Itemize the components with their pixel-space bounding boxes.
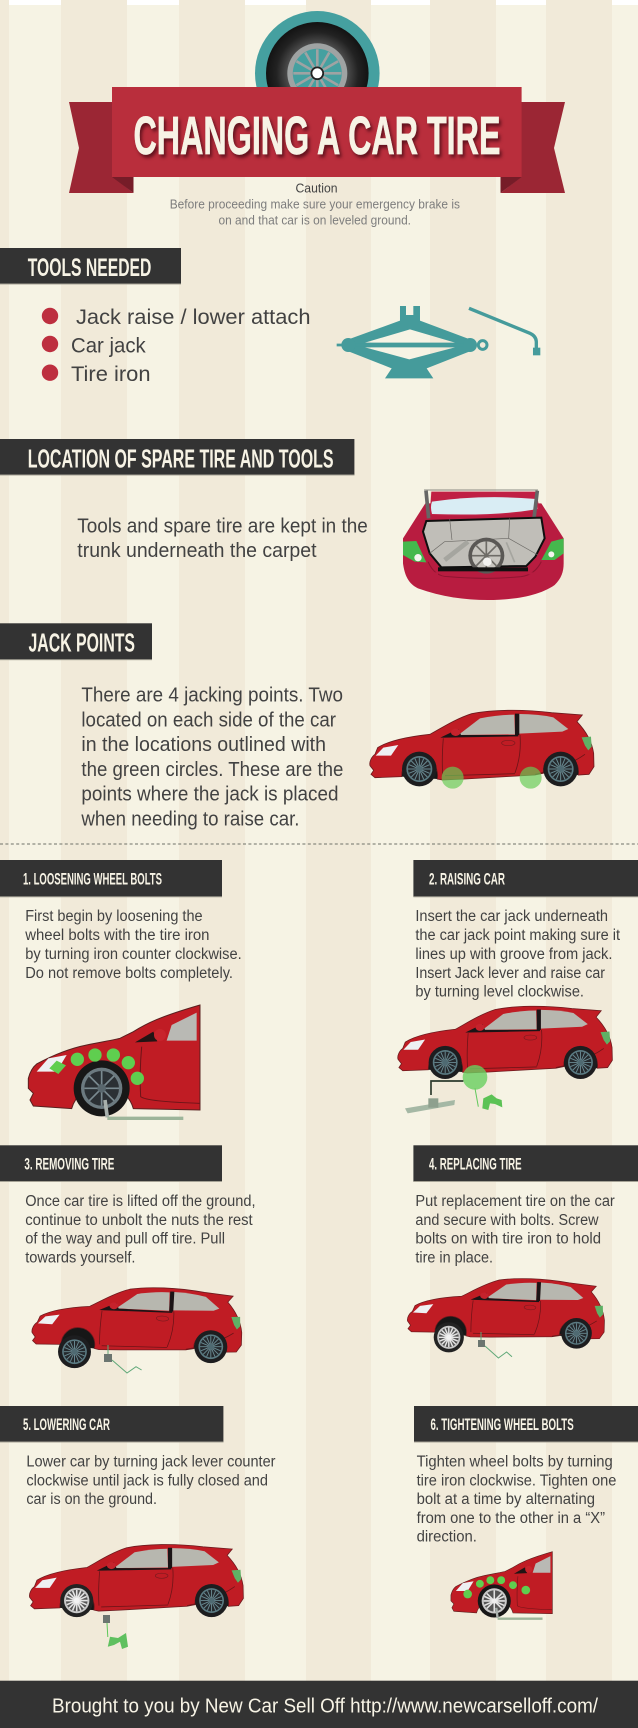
step 6 text: from one to the other in a “X” (417, 1510, 605, 1527)
jack points text: when needing to raise car. (80, 809, 300, 831)
step 6 text: bolt at a time by alternating (417, 1491, 595, 1508)
icon: open car trunk (403, 490, 564, 600)
step 2 text: lines up with groove from jack. (415, 946, 612, 963)
step 5 text: Lower car by turning jack lever counter (26, 1453, 276, 1470)
step 4 car image (407, 1272, 607, 1358)
heading: jack points (0, 623, 152, 660)
jack points text (80, 685, 343, 831)
step 2 panel (398, 860, 638, 1113)
jack points text: located on each side of the car (81, 709, 336, 731)
step 5 heading: 5. LOWERING CAR (23, 1416, 110, 1434)
step 1 panel (0, 860, 242, 1118)
step 1 text: wheel bolts with the tire iron (24, 927, 209, 944)
tools list: Car jack (71, 334, 146, 358)
location text (77, 515, 368, 562)
icon: scissor jack (337, 306, 487, 378)
step 1 text: Do not remove bolts completely. (25, 965, 233, 982)
step 3 text (25, 1193, 256, 1267)
step 5 panel (0, 1406, 276, 1649)
jack points text: There are 4 jacking points. Two (81, 685, 343, 707)
step 4 text: bolts on with tire iron to hold (415, 1231, 601, 1248)
jack points text: the green circles. These are the (81, 759, 343, 781)
step 2 heading (413, 860, 638, 897)
location text: Tools and spare tire are kept in the (77, 515, 368, 537)
step 2 text: the car jack point making sure it (415, 927, 621, 944)
caution text: on and that car is on leveled ground. (218, 213, 411, 227)
step 2 car image (398, 1006, 612, 1079)
step 3 text: Once car tire is lifted off the ground, (25, 1193, 256, 1210)
step 4 text: and secure with bolts. Screw (415, 1212, 599, 1229)
step 5 text: car is on the ground. (26, 1491, 157, 1508)
caution text: Before proceeding make sure your emergency brake is (170, 197, 460, 211)
step 6 text (417, 1453, 616, 1546)
step 1 text: by turning iron counter clockwise. (25, 946, 242, 963)
heading: tools needed (0, 248, 181, 284)
step 5 text: clockwise until jack is fully closed and (26, 1472, 268, 1489)
footer (0, 1681, 638, 1728)
jack points text: in the locations outlined with (81, 734, 326, 756)
caution text: Caution (296, 182, 338, 196)
step 6 heading (414, 1406, 638, 1442)
step 6 text: tire iron clockwise. Tighten one (417, 1472, 616, 1489)
banner right tail (500, 102, 565, 193)
step 2 jack detail (405, 1065, 502, 1113)
icon: tire (255, 11, 380, 136)
banner ribbon (112, 87, 522, 177)
banner left tail (69, 102, 134, 193)
step 4 heading (413, 1145, 638, 1182)
footer: Brought to you by New Car Sell Off http://www.newcarselloff.com/ (52, 1696, 598, 1718)
step 5 car image (29, 1545, 243, 1617)
step 4 text: tire in place. (415, 1250, 493, 1267)
step 5 text (26, 1453, 276, 1508)
step 4 heading: 4. REPLACING TIRE (429, 1156, 522, 1174)
jack point front (442, 767, 464, 789)
step 3 text: continue to unbolt the nuts the rest (25, 1212, 253, 1229)
step 6 text: Tighten wheel bolts by turning (417, 1453, 613, 1470)
step 3 text: towards yourself. (25, 1250, 136, 1267)
step 1 heading: 1. LOOSENING WHEEL BOLTS (23, 870, 162, 888)
step 4 jack (478, 1332, 512, 1358)
jack points text: points where the jack is placed (81, 784, 339, 806)
step 3 text: of the way and pull off tire. Pull (25, 1231, 225, 1248)
tools list: Tire iron (71, 362, 150, 386)
icon: tire iron (469, 308, 540, 355)
tools list: Jack raise / lower attach (76, 305, 310, 329)
step 1 car image (28, 1005, 200, 1118)
step 6 car image (451, 1552, 552, 1619)
tools list (42, 305, 311, 386)
step 5 heading (0, 1406, 223, 1442)
heading: location of spare tire and tools (0, 439, 354, 476)
car with jack points (370, 710, 594, 789)
title banner (69, 87, 565, 193)
step 3 car image (31, 1281, 244, 1373)
step 1 text (24, 908, 242, 982)
step 3 jack (104, 1345, 142, 1373)
step 3 heading (0, 1145, 222, 1182)
step 4 text (415, 1193, 615, 1267)
step 6 panel (414, 1406, 638, 1619)
step 4 panel (407, 1145, 638, 1358)
location text: trunk underneath the carpet (77, 540, 317, 562)
step 2 heading: 2. RAISING CAR (429, 870, 505, 888)
caution text (170, 182, 460, 227)
heading: location of spare tire and tools: LOCATION OF SPARE TIRE AND TOOLS (28, 444, 334, 474)
step 5 jack and arrow (103, 1615, 128, 1649)
step 6 text: direction. (417, 1529, 477, 1546)
heading: jack points: JACK POINTS (28, 630, 135, 658)
step 3 heading: 3. REMOVING TIRE (24, 1156, 114, 1174)
step 2 text (415, 908, 621, 1001)
step 2 text: Insert Jack lever and raise car (415, 965, 605, 982)
step 2 text: Insert the car jack underneath (415, 908, 608, 925)
step 2 text: by turning level clockwise. (415, 984, 584, 1001)
step 3 panel (0, 1145, 256, 1373)
step 1 text: First begin by loosening the (25, 908, 203, 925)
step 4 text: Put replacement tire on the car (415, 1193, 615, 1210)
step 1 heading (0, 860, 222, 897)
jack point rear (520, 767, 542, 789)
heading: tools needed: TOOLS NEEDED (28, 254, 151, 282)
